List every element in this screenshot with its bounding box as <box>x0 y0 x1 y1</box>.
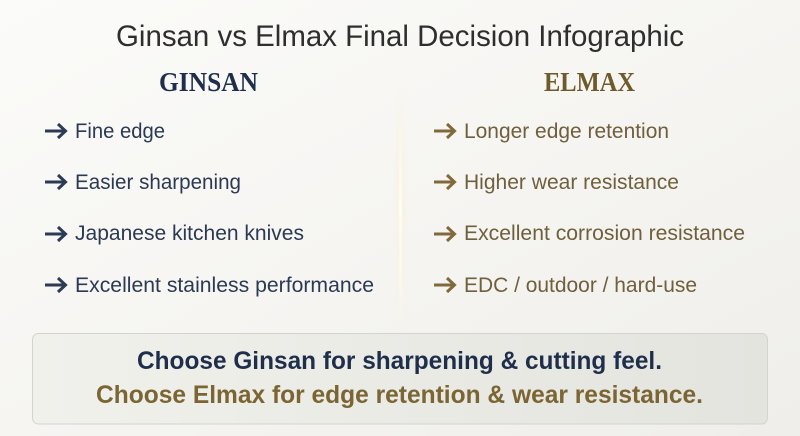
item: Excellent corrosion resistance: Excellent corrosion resistance <box>464 222 745 245</box>
item: Higher wear resistance: Higher wear resistance <box>464 171 679 194</box>
item: EDC / outdoor / hard-use: EDC / outdoor / hard-use <box>464 274 697 297</box>
item: Fine edge: Fine edge <box>75 120 165 143</box>
item: Excellent stainless performance: Excellent stainless performance <box>75 274 374 297</box>
title: Ginsan vs Elmax Final Decision Infographic <box>116 20 684 53</box>
panel: Ginsan <box>45 67 374 297</box>
callout line: Ginsan: Choose Ginsan for sharpening & cutting feel. <box>137 347 662 375</box>
item: Easier sharpening: Easier sharpening <box>75 171 241 194</box>
item: Japanese kitchen knives: Japanese kitchen knives <box>75 222 304 245</box>
item: Longer edge retention: Longer edge retention <box>464 120 669 143</box>
heading: Ginsan: GINSAN <box>159 67 258 97</box>
heading: Elmax: ELMAX <box>544 67 635 97</box>
center divider glow <box>396 75 405 333</box>
panel: Elmax <box>434 67 745 297</box>
callout line: Elmax: Choose Elmax for edge retention & wear resistance. <box>96 381 703 409</box>
callout: final decision <box>32 334 768 424</box>
